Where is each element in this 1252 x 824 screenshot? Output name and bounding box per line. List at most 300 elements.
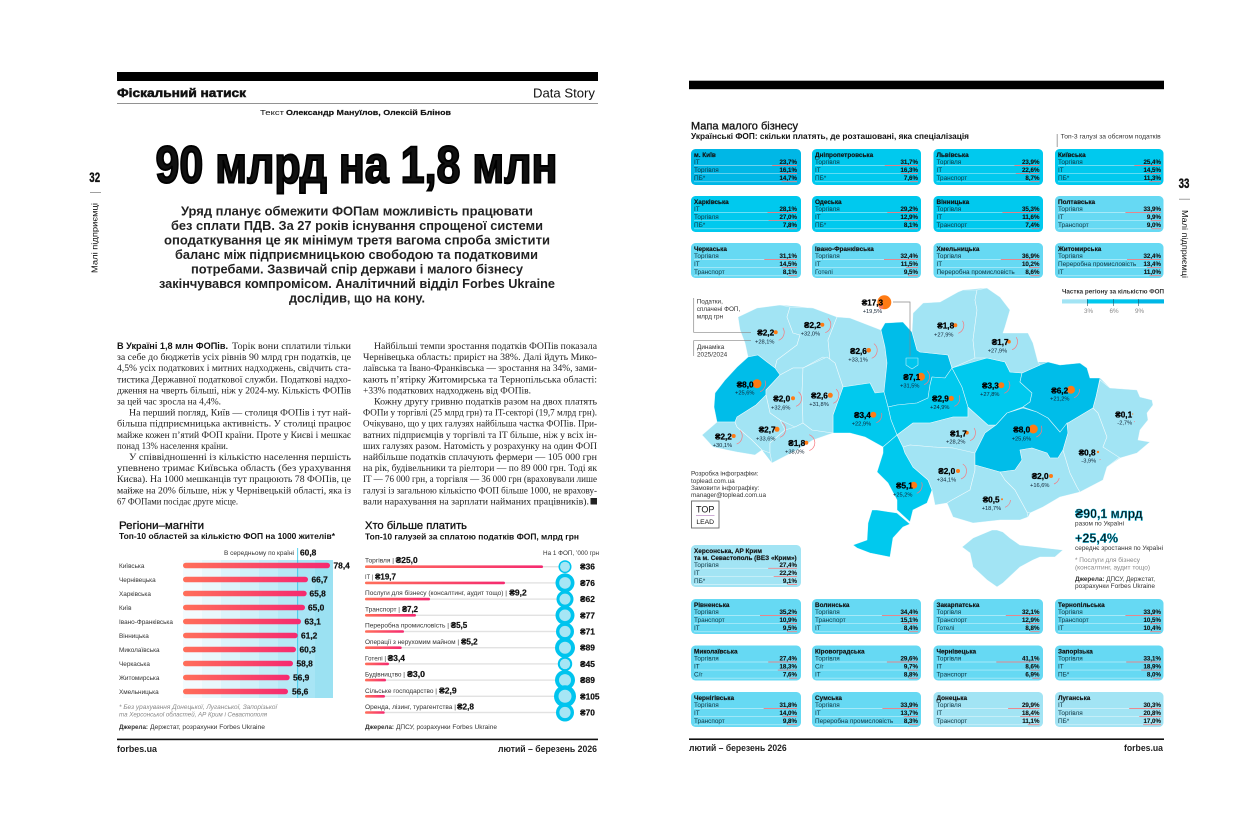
card: Миколаївська: Торгівля xyxy=(694,654,719,662)
article text left column: 67 ФОПами посідає друге місце. xyxy=(117,497,238,507)
bar row: Хмельницька xyxy=(119,686,309,696)
value: Луганська xyxy=(1115,410,1135,426)
value: Чернівецька xyxy=(785,435,815,456)
row: Готелі: ₴45 xyxy=(580,659,595,669)
article text left column xyxy=(117,341,352,507)
card: Хмельницька xyxy=(934,243,1043,278)
intro paragraph: Уряд планує обмежити ФОПам можливість працювати xyxy=(181,204,533,218)
card: Хмельницька: IT xyxy=(936,261,942,268)
card: Рівненська: Транспорт xyxy=(694,617,725,624)
card: Запорізька: ПБ* xyxy=(1058,672,1070,679)
card: Кіровоградська xyxy=(812,646,921,680)
card: Київська: 25,4% xyxy=(1143,159,1161,166)
card: Івано-Франківська: 11,5% xyxy=(901,261,918,268)
bar row: Житомирська: Житомирська xyxy=(119,675,160,682)
value: Сумська xyxy=(988,337,1018,354)
card: Львівська: 22,6% xyxy=(1022,167,1040,174)
map key: taxes xyxy=(694,298,751,332)
intro paragraph: закінчувався компромісом. Аналітичний відділ Forbes Ukraine xyxy=(159,277,555,291)
card: Хмельницька: 36,9% xyxy=(1022,253,1040,260)
value: Кіровоградська: ₴1,7 xyxy=(950,429,967,438)
card: Черкаська: 8,1% xyxy=(783,269,797,276)
card: Житомирська: Переробна промисловість xyxy=(1058,260,1137,268)
map subheading: Українські ФОП: скільки платять, де розташовані, яка спеціалізація xyxy=(691,131,969,141)
source note: Джерела: xyxy=(365,724,394,731)
article text left column: понад 13% населення країни. xyxy=(117,442,228,452)
average marker: В середньому по країні xyxy=(224,549,294,557)
row: Торгівля: ₴36 xyxy=(580,562,595,572)
bar row: Чернівецька: 66,7 xyxy=(312,574,328,584)
card: Житомирська: 11,0% xyxy=(1144,269,1161,276)
row: Послуги для бізнесу: ₴62 xyxy=(580,594,595,604)
row: Оренда, лізинг, турагентства xyxy=(365,702,595,722)
totals callout: (консалтинг, аудит тощо) xyxy=(1075,564,1150,572)
card: Одеська: IT xyxy=(815,214,821,221)
value: Закарпатська xyxy=(713,430,742,449)
card: Львівська: Львівська xyxy=(936,151,969,159)
card: Рівненська xyxy=(691,599,801,634)
card: Тернопільська: 33,9% xyxy=(1143,609,1161,616)
chart heading: Хто більше платить xyxy=(365,520,467,532)
card: Запорізька: Торгівля xyxy=(1058,654,1083,662)
value: Львівська: +25,6% xyxy=(735,391,754,397)
value: Київська: ₴7,1 xyxy=(903,373,921,382)
card: Тернопільська: 10,5% xyxy=(1143,617,1161,624)
value: Харківська xyxy=(1050,386,1080,403)
card: Львівська: Торгівля xyxy=(936,158,962,166)
card: Харківська: 7,8% xyxy=(783,222,797,229)
card: Хмельницька: 8,6% xyxy=(1025,269,1040,276)
card: Полтавська: 33,9% xyxy=(1143,206,1161,213)
average marker xyxy=(224,547,317,698)
value: Івано-Франківська xyxy=(756,422,786,442)
card: Київська: Київська xyxy=(1058,152,1086,159)
left page margin: page number 32: 32 xyxy=(89,171,100,185)
row: Транспорт: ₴7,2 xyxy=(402,604,418,614)
value: Одеська xyxy=(893,482,922,498)
value: Сумська: ₴1,7 xyxy=(992,338,1009,347)
card: Закарпатська: Закарпатська xyxy=(936,602,980,609)
row: Операції з нерухомим майном: ₴89 xyxy=(580,643,595,653)
chart background bands xyxy=(183,560,333,698)
row: Оренда, лізинг, турагентства: ₴70 xyxy=(580,708,595,718)
card: Донецька: Транспорт xyxy=(936,718,967,725)
top-3 note xyxy=(1057,132,1161,147)
bar row: Івано-Франківська: Івано-Франківська xyxy=(119,618,173,626)
article text right column: найбільше податків сплачують фермери — 105 000 грн xyxy=(363,452,597,463)
card: Миколаївська xyxy=(691,646,801,680)
card: Тернопільська xyxy=(1055,599,1164,634)
totals callout xyxy=(1075,506,1163,590)
section tag: Data Story xyxy=(533,86,595,100)
value: Херсонська xyxy=(982,495,1010,512)
row: Сільське господарство: ₴105 xyxy=(580,691,600,701)
bar row: Харківська: 65,8 xyxy=(310,588,326,598)
article text right column: вали нарахування на зарплати найманих працівників). xyxy=(363,496,589,507)
right page margin: page number 33: 33 xyxy=(1179,177,1190,191)
card: Львівська: IT xyxy=(936,167,942,174)
value: Миколаївська: ₴2,0 xyxy=(938,467,956,476)
value: Черкаська xyxy=(930,395,960,411)
card: Івано-Франківська: Івано-Франківська xyxy=(815,245,874,253)
card: Кіровоградська: 29,6% xyxy=(900,656,918,662)
left page margin: page number 32 xyxy=(89,171,101,273)
value: Полтавська: ₴3,3 xyxy=(982,382,999,391)
bar row: Миколаївська: 60,3 xyxy=(300,644,316,654)
section heading: Фіскальний натиск xyxy=(117,86,247,100)
card: Сумська: IT xyxy=(815,710,821,717)
chart heading: Регіони–магніти xyxy=(119,520,204,532)
totals callout: ₴90,1 млрд xyxy=(1075,506,1143,521)
article text right column: Очікувано, що у цих галузях найбільша частка ФОПів. При- xyxy=(363,419,597,430)
row: IT: IT | xyxy=(365,574,373,581)
card: Черкаська: IT xyxy=(694,261,700,268)
card: Волинська: 8,4% xyxy=(904,625,918,632)
card: м. Київ: 16,1% xyxy=(779,167,797,174)
card: Рівненська: Торгівля xyxy=(694,608,719,616)
card: м. Київ xyxy=(691,149,801,185)
top-3 note: Топ-3 галузі за обсягом податків xyxy=(1061,132,1161,140)
chart: regions-magnets xyxy=(119,520,350,731)
card: м. Київ: 14,7% xyxy=(779,175,797,182)
byline: Текст xyxy=(260,108,285,117)
row: Операції з нерухомим майном: Операції з нерухомим майном | xyxy=(365,638,459,646)
row: Послуги для бізнесу xyxy=(365,588,595,608)
card: Миколаївська: 7,6% xyxy=(783,672,797,679)
card: Вінницька: 35,3% xyxy=(1022,206,1040,213)
card: Чернігівська: Транспорт xyxy=(694,718,725,725)
card: Рівненська: IT xyxy=(694,625,700,632)
card: Донецька: 18,4% xyxy=(1022,710,1040,717)
intro paragraph: баланс між підприємницькою свободою та податковими xyxy=(175,248,538,262)
source note: Держстат, розрахунки Forbes Ukraine xyxy=(150,724,265,731)
card: Полтавська: Полтавська xyxy=(1058,199,1096,206)
row: Будівництво: ₴3,0 xyxy=(407,669,425,679)
value: Чернігівська: ₴1,8 xyxy=(937,322,955,331)
card: Закарпатська: Готелі xyxy=(936,624,954,632)
card: Сумська: 33,9% xyxy=(900,702,918,709)
bar row: Київ: Київ xyxy=(119,605,132,612)
value: Запорізька: ₴2,0 xyxy=(1032,472,1049,481)
article text right column: ватних підприємців у торгівлі та IT більше, ніж у всіх ін- xyxy=(363,430,597,441)
card: Миколаївська: 18,3% xyxy=(779,664,797,671)
bar row: Хмельницька: 56,6 xyxy=(292,686,309,696)
logo: Top Lead: TOP xyxy=(696,504,714,514)
intro paragraph: без сплати ПДВ. За 27 років існування спрощеної системи xyxy=(171,219,543,233)
row: Транспорт: ₴77 xyxy=(580,610,595,620)
value: Рівненська xyxy=(801,318,831,337)
map heading: Мапа малого бізнесу xyxy=(691,120,798,132)
card: Харківська: ПБ* xyxy=(694,222,706,229)
bar row: Черкаська: Черкаська xyxy=(119,661,150,668)
article text left column: упевнено тримає Київська область (без урахування xyxy=(117,463,352,474)
bar row: Вінницька xyxy=(119,630,318,640)
card: Закарпатська: Транспорт xyxy=(936,617,967,624)
card: Черкаська: 14,5% xyxy=(779,261,797,268)
legend: region share xyxy=(1062,287,1164,315)
bar row: Хмельницька: Хмельницька xyxy=(119,689,159,696)
map key: taxes: Податки, xyxy=(697,299,723,306)
row: Будівництво: Будівництво | xyxy=(365,671,405,679)
card: Полтавська: 9,9% xyxy=(1147,214,1161,221)
value: Полтавська: +27,8% xyxy=(980,392,999,398)
row: Операції з нерухомим майном xyxy=(365,636,595,658)
value: Чернівецька: +38,0% xyxy=(785,450,804,456)
card: Дніпропетровська: 31,7% xyxy=(900,159,918,166)
column label: На 1 ФОП, ’000 грн xyxy=(543,550,599,557)
value: Донецька: -3,9% xyxy=(1081,458,1096,464)
card: Запорізька: 18,9% xyxy=(1143,664,1161,671)
value: Одеська: ₴5,1 xyxy=(896,482,913,491)
value: м. Київ: +19,5% xyxy=(863,309,882,315)
card: Сумська: Сумська xyxy=(815,695,842,702)
bar row: Київ xyxy=(119,602,325,612)
card: Херсонська, АР Крим та м. Севастополь: та м. Севастополь (ВЕЗ «Крим») xyxy=(694,555,797,562)
row: Операції з нерухомим майном: ₴5,2 xyxy=(461,636,478,646)
row: Оренда, лізинг, турагентства: Оренда, лізинг, турагентства | xyxy=(365,703,456,711)
map key: dynamics: 2025/2024 xyxy=(697,351,728,358)
left page footer: лютий – березень 2026 xyxy=(498,744,597,755)
card: Одеська: ПБ* xyxy=(815,222,827,229)
value: м. Київ xyxy=(862,295,891,315)
card: Одеська: 12,9% xyxy=(900,214,918,221)
bar row: Івано-Франківська: 63,1 xyxy=(304,616,321,626)
value: Хмельницька: ₴2,6 xyxy=(811,392,828,401)
card: Тернопільська: 10,4% xyxy=(1143,625,1161,632)
totals callout: розрахунки Forbes Ukraine xyxy=(1075,583,1155,590)
value: Волинська: +28,1% xyxy=(755,340,774,346)
article text right column: ших галузях разом. Натомість у розрахунку на один ФОП xyxy=(363,442,597,452)
bar row: Київська xyxy=(119,560,350,570)
row: IT: ₴19,7 xyxy=(375,571,396,581)
article text right column: IT — 76 000 грн, а торгівля — 36 000 грн (враховували лише xyxy=(363,474,597,485)
card: м. Київ: IT xyxy=(694,159,700,166)
card: Луганська: Торгівля xyxy=(1058,709,1083,717)
card: Івано-Франківська: Торгівля xyxy=(815,252,840,260)
totals callout: середнє зростання по Україні xyxy=(1075,544,1163,552)
value: Житомирська xyxy=(848,344,877,363)
row: Сільське господарство: ₴2,9 xyxy=(439,685,457,695)
card: Житомирська: Житомирська xyxy=(1057,246,1102,253)
credits: toplead.com.ua xyxy=(691,478,735,485)
card: Івано-Франківська: IT xyxy=(815,261,821,268)
card: Запорізька: 33,1% xyxy=(1143,656,1161,662)
right page header bar xyxy=(689,81,1164,89)
main title: 90 млрд на 1,8 млн xyxy=(156,136,558,194)
value: Волинська: ₴2,2 xyxy=(757,329,775,338)
card: Івано-Франківська xyxy=(812,243,921,278)
card: Закарпатська: 8,8% xyxy=(1025,625,1040,632)
intro paragraph xyxy=(159,204,555,306)
value: Вінницька xyxy=(852,411,882,427)
legend: region share: 9% xyxy=(1135,308,1145,315)
value: Житомирська: ₴2,6 xyxy=(850,347,867,356)
card: Сумська xyxy=(812,692,921,727)
card: Чернівецька: IT xyxy=(936,664,942,671)
card: Дніпропетровська: ПБ* xyxy=(815,175,827,182)
card: Харківська: Торгівля xyxy=(694,213,719,221)
value: Миколаївська xyxy=(937,464,967,484)
card: Тернопільська: Транспорт xyxy=(1058,617,1089,624)
card: м. Київ: Торгівля xyxy=(694,166,719,174)
card: Запорізька: IT xyxy=(1058,664,1064,671)
card: Луганська: 20,8% xyxy=(1143,710,1161,717)
card: Чернівецька: Чернівецька xyxy=(936,648,977,656)
map of Ukraine xyxy=(694,288,1153,587)
card: Харківська: 27,0% xyxy=(779,214,797,221)
region shapes xyxy=(702,288,1153,587)
card: Херсонська, АР Крим та м. Севастополь: Херсонська, АР Крим xyxy=(694,548,762,555)
intro paragraph: оподаткування це як мінімум третя вагома спроба змістити xyxy=(164,234,550,248)
value: Одеська: +25,2% xyxy=(893,492,912,498)
value: Житомирська: +33,1% xyxy=(848,357,868,363)
card: Івано-Франківська: 9,5% xyxy=(904,269,918,276)
article text left column: 4,5% усіх податкових і митних надходжень, свідчить ста- xyxy=(117,364,351,374)
article text right column: кають п’ятірку Житомирська та Тернопільська області: xyxy=(363,374,597,385)
card: Чернігівська: 14,0% xyxy=(779,710,797,717)
card: Чернігівська: Торгівля xyxy=(694,701,719,709)
card: Харківська: IT xyxy=(694,206,700,213)
card: Херсонська, АР Крим та м. Севастополь: Торгівля xyxy=(694,561,719,569)
card: Черкаська xyxy=(691,243,801,278)
card: Житомирська xyxy=(1055,243,1164,278)
row: Готелі: ₴3,4 xyxy=(388,653,405,663)
card: Кіровоградська: Торгівля xyxy=(815,654,840,662)
card: Кіровоградська: С/г xyxy=(815,664,824,671)
bar row: Житомирська xyxy=(119,672,310,682)
article text left column: В Україні 1,8 млн ФОПів. xyxy=(117,341,228,351)
legend: region share: Частка регіону за кількістю ФОП xyxy=(1062,287,1164,295)
chart subheading: Топ-10 галузей за сплатою податків ФОП, млрд грн xyxy=(365,532,579,542)
value: Чернівецька: ₴1,8 xyxy=(788,439,806,448)
row: Переробна промисловість xyxy=(365,620,595,640)
row: Торгівля: ₴25,0 xyxy=(396,555,418,565)
card: Вінницька xyxy=(934,196,1043,232)
value: Рівненська: +32,0% xyxy=(801,331,820,337)
bar row: Черкаська: 58,8 xyxy=(296,658,313,668)
article text right column: лаївська та Івано-Франківська — зростання на 34%, зами- xyxy=(363,364,597,374)
value: Дніпропетровська: +25,6% xyxy=(1012,436,1031,442)
card: Одеська: Торгівля xyxy=(815,205,840,213)
article text right column: Найбільші темпи зростання податків ФОПів показала xyxy=(374,341,597,352)
logo: Top Lead xyxy=(692,501,719,528)
article text right column: +33% податкових надходжень від ФОПів. xyxy=(363,386,531,396)
card: Волинська: Волинська xyxy=(815,602,850,609)
card: Вінницька: 11,6% xyxy=(1022,214,1040,221)
card: Житомирська: 32,4% xyxy=(1143,253,1161,260)
credits: Замовити інфографіку: xyxy=(691,484,760,492)
card: м. Київ: м. Київ xyxy=(694,152,716,159)
card: Чернівецька: Транспорт xyxy=(936,672,967,679)
card: Закарпатська: 32,1% xyxy=(1022,609,1040,616)
article text left column: за себе до бюджетів усіх рівнів 90 млрд грн податків, це xyxy=(117,352,351,363)
card: Рівненська: Рівненська xyxy=(694,601,730,609)
card: Сумська: Переробна промисловість xyxy=(815,717,894,725)
card: Волинська: 34,4% xyxy=(900,609,918,616)
card: Дніпропетровська: 7,6% xyxy=(904,175,918,182)
value: Чернігівська xyxy=(934,321,964,338)
value: Івано-Франківська: +33,6% xyxy=(756,436,775,442)
left page margin: page number 32: Малі підприємці xyxy=(90,203,100,273)
card: Вінницька: Транспорт xyxy=(936,222,967,229)
card: Кіровоградська: 8,8% xyxy=(904,672,918,679)
card: Вінницька: 7,4% xyxy=(1025,222,1040,229)
card: Львівська: 23,9% xyxy=(1022,159,1040,166)
card: Херсонська, АР Крим та м. Севастополь xyxy=(691,545,801,587)
card: Луганська xyxy=(1055,692,1164,727)
card: Львівська: Транспорт xyxy=(936,175,967,182)
value: Черкаська: ₴2,9 xyxy=(932,395,949,404)
value: Рівненська: ₴2,2 xyxy=(804,321,821,330)
card: Житомирська: 13,4% xyxy=(1143,261,1161,268)
value: Дніпропетровська xyxy=(1012,424,1042,442)
value: м. Київ: ₴17,3 xyxy=(862,298,884,307)
card: Харківська: Харківська xyxy=(694,198,729,206)
Kyiv connector arrow xyxy=(893,302,910,356)
card: Кіровоградська: 9,7% xyxy=(904,664,918,671)
article text left column: На перший погляд, Київ — столиця ФОПів і тут най- xyxy=(129,408,351,419)
card: Волинська: Транспорт xyxy=(815,617,846,624)
card: Полтавська xyxy=(1055,196,1164,232)
card: Київська: ПБ* xyxy=(1058,175,1070,182)
value: Сумська: +27,9% xyxy=(988,348,1007,354)
bar row: Харківська xyxy=(119,588,326,598)
card: Дніпропетровська: Торгівля xyxy=(815,158,840,166)
card: Дніпропетровська: Дніпропетровська xyxy=(815,151,874,159)
right page footer xyxy=(689,738,1164,754)
map key: dynamics xyxy=(694,341,751,358)
value: Херсонська: +18,7% xyxy=(982,506,1001,512)
card: Львівська: 8,7% xyxy=(1025,175,1040,182)
value: Закарпатська: +30,1% xyxy=(713,443,732,449)
card: Тернопільська: Тернопільська xyxy=(1058,601,1105,609)
card: Хмельницька: Торгівля xyxy=(936,252,962,260)
value: Харківська: +21,2% xyxy=(1050,397,1069,403)
totals callout: * Послуги для бізнесу xyxy=(1075,556,1141,564)
article text left column: майже на 20% більше, ніж у Чернівецькій області, яка із xyxy=(117,485,351,496)
card: Волинська: 15,1% xyxy=(900,617,918,624)
right page margin: page number 33 xyxy=(1179,177,1190,278)
card: Одеська: 29,2% xyxy=(900,206,918,213)
card: Вінницька: IT xyxy=(936,214,942,221)
map key: taxes: млрд грн xyxy=(697,314,724,321)
bar row: Чернівецька: Чернівецька xyxy=(119,576,156,584)
row: Будівництво: ₴89 xyxy=(580,675,595,685)
card: Івано-Франківська: 32,4% xyxy=(900,253,918,260)
card: Кіровоградська: Кіровоградська xyxy=(815,648,865,656)
intro paragraph: потребами. Зазвичай спір держави і малого бізнесу xyxy=(191,262,523,276)
legend: region share: 6% xyxy=(1110,308,1119,315)
article text left column: У співвідношенні із кількістю населення першість xyxy=(129,453,351,463)
card: Рівненська: 9,5% xyxy=(783,625,797,632)
bar row: Житомирська: 56,9 xyxy=(293,672,310,682)
card: Херсонська, АР Крим та м. Севастополь: 27,4% xyxy=(779,562,797,569)
right page footer: лютий – березень 2026 xyxy=(689,743,787,754)
card: Чернігівська: 9,8% xyxy=(783,718,797,725)
footnote: та Херсонської областей, АР Крим і Севастополя xyxy=(119,710,268,718)
card: Житомирська: Торгівля xyxy=(1058,252,1083,260)
card: Полтавська: IT xyxy=(1058,214,1064,221)
value: Львівська: ₴8,0 xyxy=(737,380,754,389)
credits xyxy=(691,470,766,499)
card: Одеська xyxy=(812,196,921,232)
card: Чернігівська xyxy=(691,692,801,727)
card: Черкаська: 31,1% xyxy=(779,253,797,260)
card: Рівненська: 10,9% xyxy=(779,617,797,624)
card: Луганська: IT xyxy=(1058,702,1064,709)
legend: region share: 3% xyxy=(1084,308,1094,315)
card: Чернігівська: IT xyxy=(694,710,700,717)
